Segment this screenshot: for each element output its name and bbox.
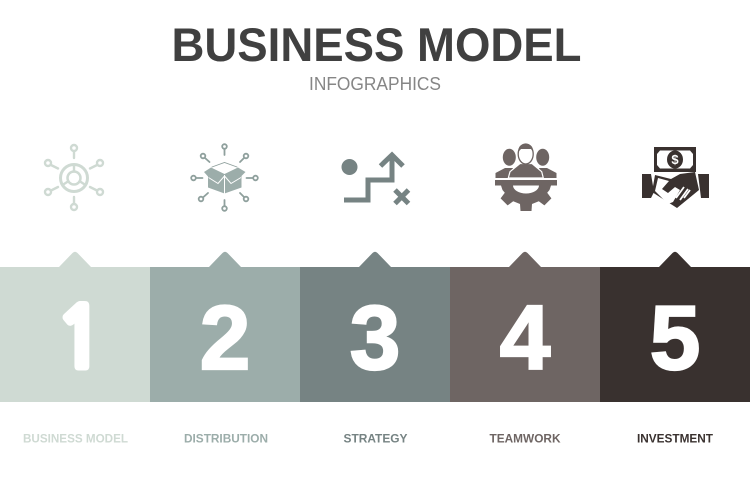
panel: step 2 xyxy=(150,252,300,402)
label: distribution: DISTRIBUTION xyxy=(184,432,268,446)
icon: money and handshake xyxy=(642,147,709,208)
icon: team and gear xyxy=(495,144,557,211)
title: BUSINESS MODEL xyxy=(172,18,582,71)
number 5: 5 xyxy=(650,288,700,389)
icon: money and handshake: $ xyxy=(671,152,679,167)
icon: strategy steps xyxy=(342,155,408,204)
number 4: 4 xyxy=(500,288,551,389)
number 1: 1 xyxy=(55,298,105,380)
number 3: 3 xyxy=(350,288,400,389)
icon: open box xyxy=(191,144,258,211)
label: teamwork: TEAMWORK xyxy=(490,432,561,446)
label: strategy: STRATEGY xyxy=(344,432,408,446)
subtitle: INFOGRAPHICS xyxy=(309,74,441,94)
panel: step 3 xyxy=(300,252,450,402)
icon: network hub xyxy=(45,145,103,210)
panel: step 5 xyxy=(600,252,750,402)
label: investment: INVESTMENT xyxy=(637,432,714,446)
number 2: 2 xyxy=(200,288,250,389)
panel: step 4 xyxy=(450,252,600,402)
label: business model: BUSINESS MODEL xyxy=(23,432,128,446)
panel: step 1 xyxy=(0,252,150,402)
